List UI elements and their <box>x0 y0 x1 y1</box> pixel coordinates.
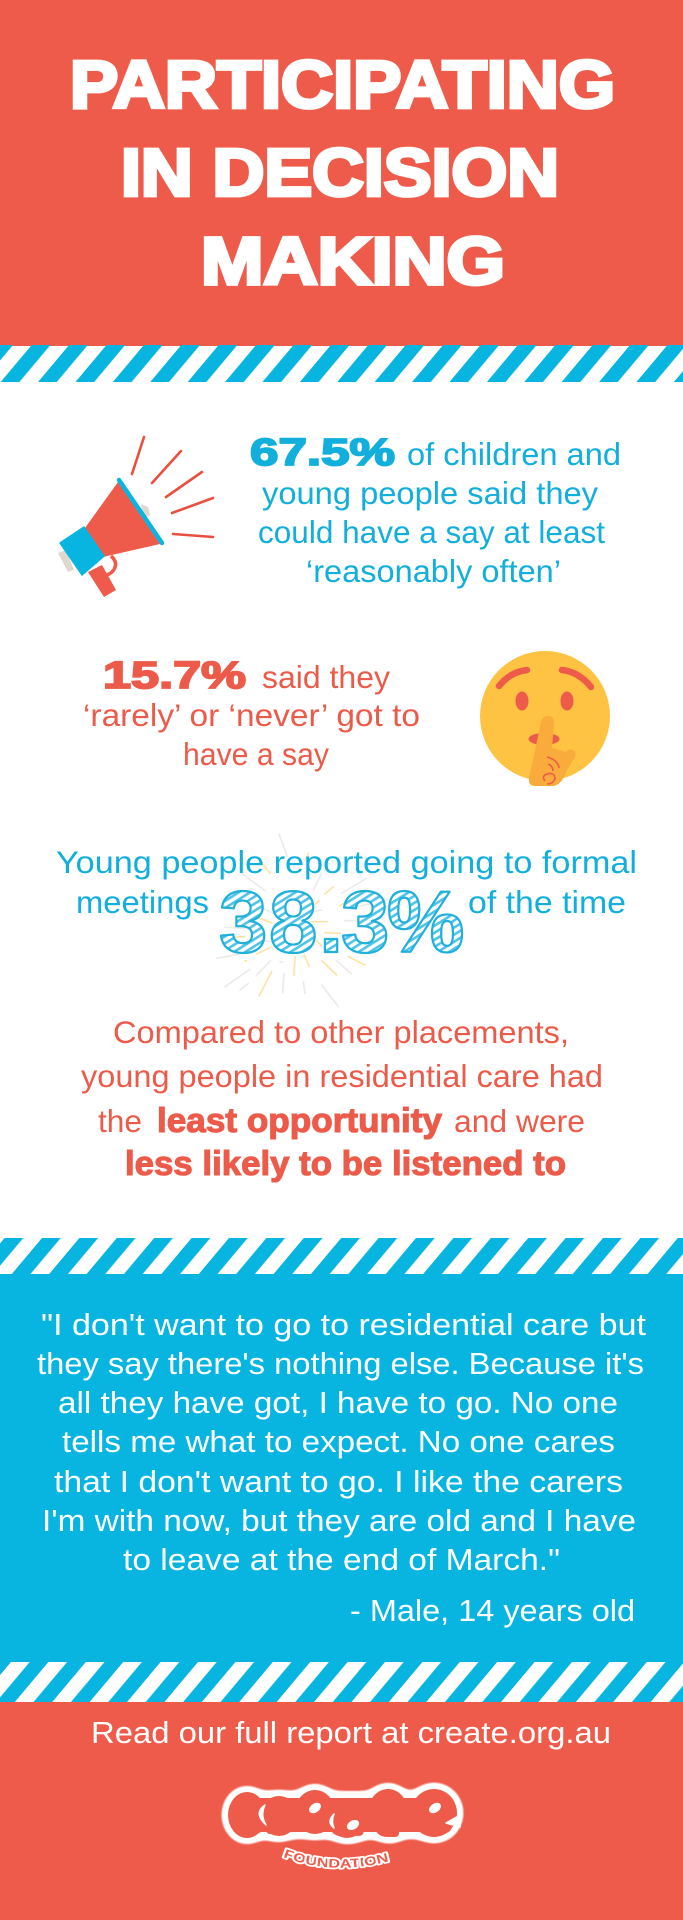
logo: create foundation: create <box>233 1784 451 1845</box>
text block: formal meetings: of the time <box>468 884 626 920</box>
text block: formal meetings: meetings <box>76 884 209 920</box>
text block: 67.5%: 67.5% <box>250 432 395 474</box>
title: PARTICIPATING <box>70 48 615 122</box>
text block: 67.5%: of children and <box>407 436 621 472</box>
panel: quote <box>0 1274 683 1702</box>
stat: 38.3% sketched number: 38.3% <box>219 874 464 971</box>
text block: 67.5%: young people said they <box>262 475 598 511</box>
quote text <box>37 1308 647 1577</box>
text block: residential care comparison: Compared to other placements, <box>113 1014 569 1050</box>
quote text: that I don't want to go. I like the carers <box>54 1465 623 1499</box>
text block: 15.7%: said they <box>262 659 390 695</box>
text block: residential care comparison <box>81 1014 603 1183</box>
illustration: sunburst rays <box>217 834 387 1007</box>
text block: residential care comparison: young people in residential care had <box>81 1058 603 1094</box>
striped band: below quote <box>0 1662 683 1702</box>
text block: residential care comparison: less likely to be listened to <box>125 1145 566 1183</box>
quote text: tells me what to expect. No one cares <box>62 1425 615 1459</box>
text block: residential care comparison: and were <box>454 1103 585 1139</box>
text block: residential care comparison: least opportunity <box>157 1102 442 1140</box>
text block: 15.7%: 15.7% <box>103 655 246 697</box>
striped band: top <box>0 345 683 382</box>
logo: create foundation: FOUNDATION <box>282 1847 390 1870</box>
text block: 67.5%: ‘reasonably often’ <box>306 553 561 589</box>
text block: formal meetings <box>56 844 637 971</box>
quote text: "I don't want to go to residential care but <box>41 1308 647 1342</box>
text block: 67.5% <box>250 432 621 589</box>
quote attribution: - Male, 14 years old <box>350 1594 635 1628</box>
text block: 15.7%: have a say <box>183 736 329 772</box>
icon: megaphone <box>58 437 213 597</box>
text block: formal meetings: Young people reported going to formal <box>56 844 637 880</box>
quote text: they say there's nothing else. Because it's <box>37 1347 644 1381</box>
text block: residential care comparison: the <box>98 1103 142 1139</box>
quote text: all they have got, I have to go. No one <box>58 1386 618 1420</box>
title <box>70 48 615 299</box>
title: MAKING <box>201 224 505 299</box>
text block: 15.7% <box>83 655 420 772</box>
panel: footer <box>0 1702 683 1920</box>
striped band: above quote <box>0 1238 683 1274</box>
logo: create foundation <box>220 1782 464 1870</box>
quote text: to leave at the end of March." <box>123 1543 560 1577</box>
text block: 15.7%: ‘rarely’ or ‘never’ got to <box>83 697 420 733</box>
quote text: I'm with now, but they are old and I have <box>42 1504 636 1538</box>
footer call to action: Read our full report at create.org.au <box>91 1716 611 1750</box>
text block: 67.5%: could have a say at least <box>258 514 605 550</box>
title: IN DECISION <box>121 136 559 210</box>
icon: shushing emoji face <box>480 651 610 786</box>
panel: header <box>0 0 683 346</box>
